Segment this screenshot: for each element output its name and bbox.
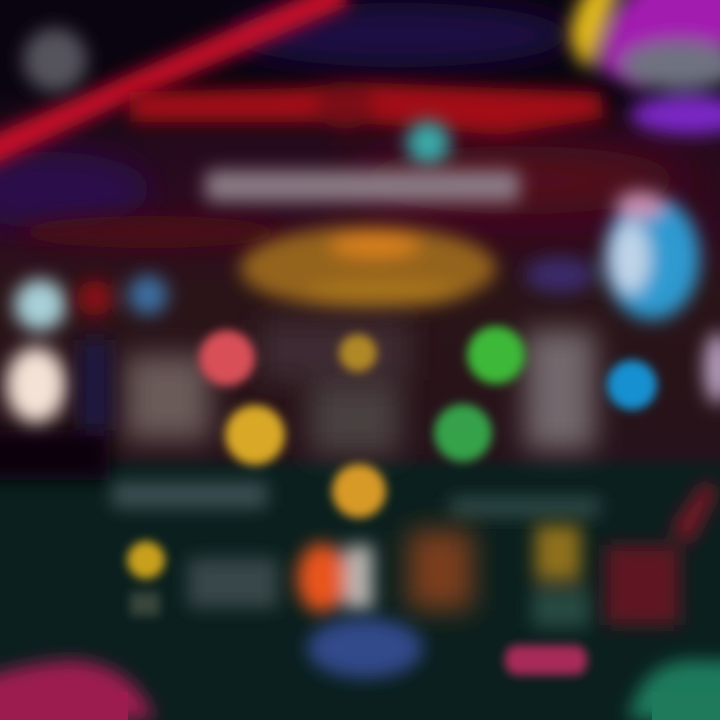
small top gem icon	[406, 121, 450, 165]
gold bottle panel	[532, 525, 590, 628]
yellow circle	[225, 405, 285, 465]
red horizontal beam	[130, 81, 605, 135]
moon top left	[23, 28, 87, 92]
green circle	[434, 404, 492, 462]
lower yellow icon	[127, 541, 165, 616]
pale edge shape right	[704, 332, 720, 404]
dark red panel	[605, 480, 718, 625]
gold banner	[240, 226, 496, 310]
blue panel bottom center	[307, 618, 423, 678]
coral circle	[199, 330, 255, 386]
rainbow orb top right	[570, 0, 720, 135]
bright green circle	[467, 326, 525, 384]
lower text block	[188, 558, 278, 608]
brown panel	[408, 530, 473, 610]
left small icons	[77, 275, 168, 430]
blue globe right	[525, 191, 700, 320]
pink mound bottom left	[0, 660, 155, 720]
lower right heading	[450, 497, 600, 517]
left white figure	[6, 279, 66, 423]
lower left heading	[112, 482, 267, 508]
blue circle right	[607, 360, 657, 410]
red diagonal beam	[0, 0, 350, 180]
orange circle	[332, 464, 386, 518]
small gold circle	[339, 334, 377, 372]
title	[205, 170, 520, 202]
green mound bottom right	[628, 660, 720, 720]
pink pill	[505, 645, 587, 675]
orange and white card	[297, 543, 373, 613]
central column panels	[125, 320, 595, 455]
